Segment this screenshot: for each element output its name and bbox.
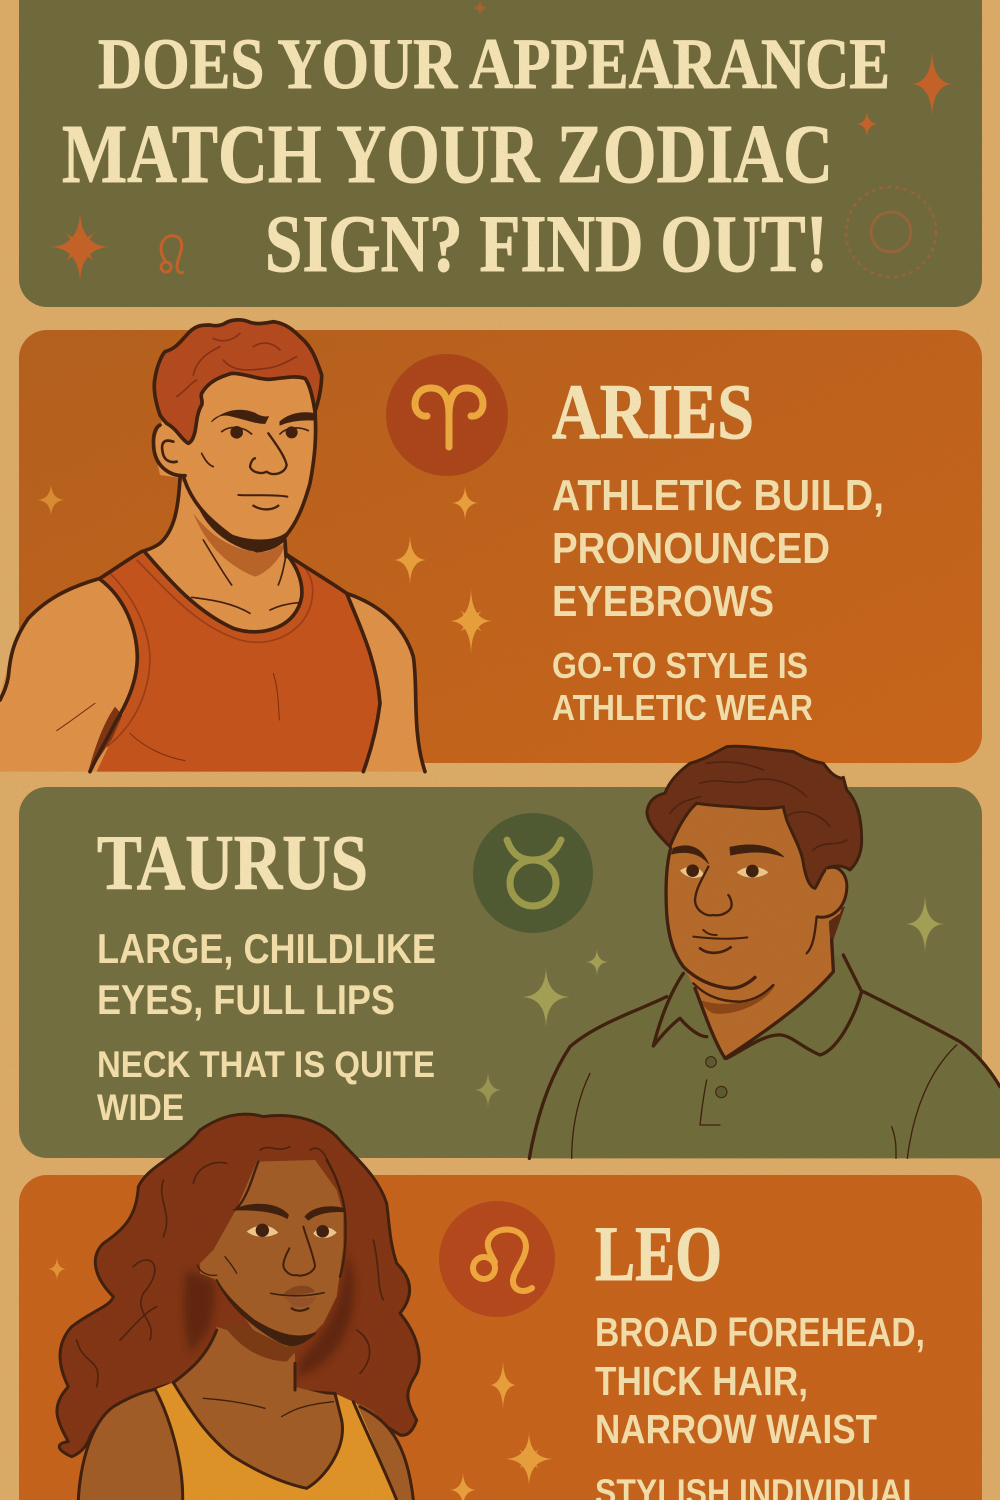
text: Aries style: GO-TO STYLE IS: [552, 645, 808, 686]
text: Aries style: ATHLETIC WEAR: [552, 687, 813, 728]
outlines: [529, 848, 1000, 1158]
icon: Taurus sparkles: [475, 895, 944, 1108]
figure: Leo woman: [57, 1114, 419, 1500]
title heading: [62, 24, 890, 289]
text: Aries style: [552, 645, 813, 728]
icon: taurus symbol: [473, 813, 593, 933]
neck shadow: [700, 985, 775, 1014]
text: Leo features: BROAD FOREHEAD,: [595, 1309, 925, 1355]
face: [200, 1160, 343, 1347]
hair: [154, 320, 322, 443]
figure: Taurus man: [528, 746, 1000, 1158]
hair shadows: [184, 1247, 354, 1377]
panel: Leo: [19, 1175, 982, 1500]
text: Leo features: [595, 1309, 925, 1452]
text: Aries features: EYEBROWS: [552, 577, 774, 626]
text: Taurus features: LARGE, CHILDLIKE: [97, 925, 436, 972]
text: Leo features: NARROW WAIST: [595, 1406, 877, 1452]
shirt buttons: [706, 1057, 727, 1098]
text: Aries features: PRONOUNCED: [552, 524, 830, 573]
arms and neck skin: [0, 480, 427, 772]
neck and shoulders: [78, 1327, 413, 1500]
text: Taurus neck: WIDE: [97, 1087, 184, 1128]
face details: [197, 1204, 343, 1417]
hair strands: [670, 762, 847, 850]
face details: [572, 845, 957, 1158]
icon: aries symbol: [386, 354, 508, 476]
icon: Aries sparkles: [37, 484, 492, 654]
hair strands: [177, 333, 297, 397]
icon: Leo sparkles: [48, 1257, 553, 1500]
text: Taurus neck: [97, 1044, 435, 1128]
title heading: SIGN? FIND OUT!: [265, 198, 828, 289]
hair: [57, 1114, 419, 1457]
face and neck skin: [666, 797, 848, 1058]
text: Aries features: ATHLETIC BUILD,: [552, 471, 884, 520]
head and body outlines: [0, 410, 425, 772]
icon: title sparkles: [50, 0, 953, 283]
text: Taurus neck: NECK THAT IS QUITE: [97, 1044, 435, 1085]
outlines: [78, 1160, 413, 1500]
hair strands: [77, 1147, 383, 1387]
heading: Aries: ARIES: [552, 368, 754, 455]
neck shadow: [193, 513, 285, 577]
title heading: MATCH YOUR ZODIAC: [62, 108, 833, 201]
top: [155, 1383, 397, 1500]
underarm shadow: [88, 707, 127, 772]
neck shadow: [220, 1320, 300, 1362]
hair: [647, 746, 862, 888]
ear: [817, 867, 847, 917]
tank top: [97, 552, 380, 772]
text: Leo features: THICK HAIR,: [595, 1358, 808, 1404]
text: Aries features: [552, 471, 884, 626]
heading: Taurus: TAURUS: [97, 819, 368, 906]
panel: Taurus: [19, 787, 982, 1158]
panel: title: [19, 0, 982, 307]
figure: Aries man: [0, 320, 427, 772]
panel: Aries: [19, 330, 982, 763]
icon: faded sun circle: [846, 187, 936, 277]
back hair wedge: [828, 907, 845, 940]
face details: [57, 410, 314, 761]
heading: Leo: LEO: [595, 1210, 722, 1297]
text: Taurus features: [97, 925, 436, 1023]
icon: small leo glyph: [161, 236, 184, 273]
text: Taurus features: EYES, FULL LIPS: [97, 976, 395, 1023]
polo shirt: [528, 955, 1000, 1158]
icon: leo symbol: [439, 1201, 555, 1317]
head skin: [153, 367, 315, 548]
